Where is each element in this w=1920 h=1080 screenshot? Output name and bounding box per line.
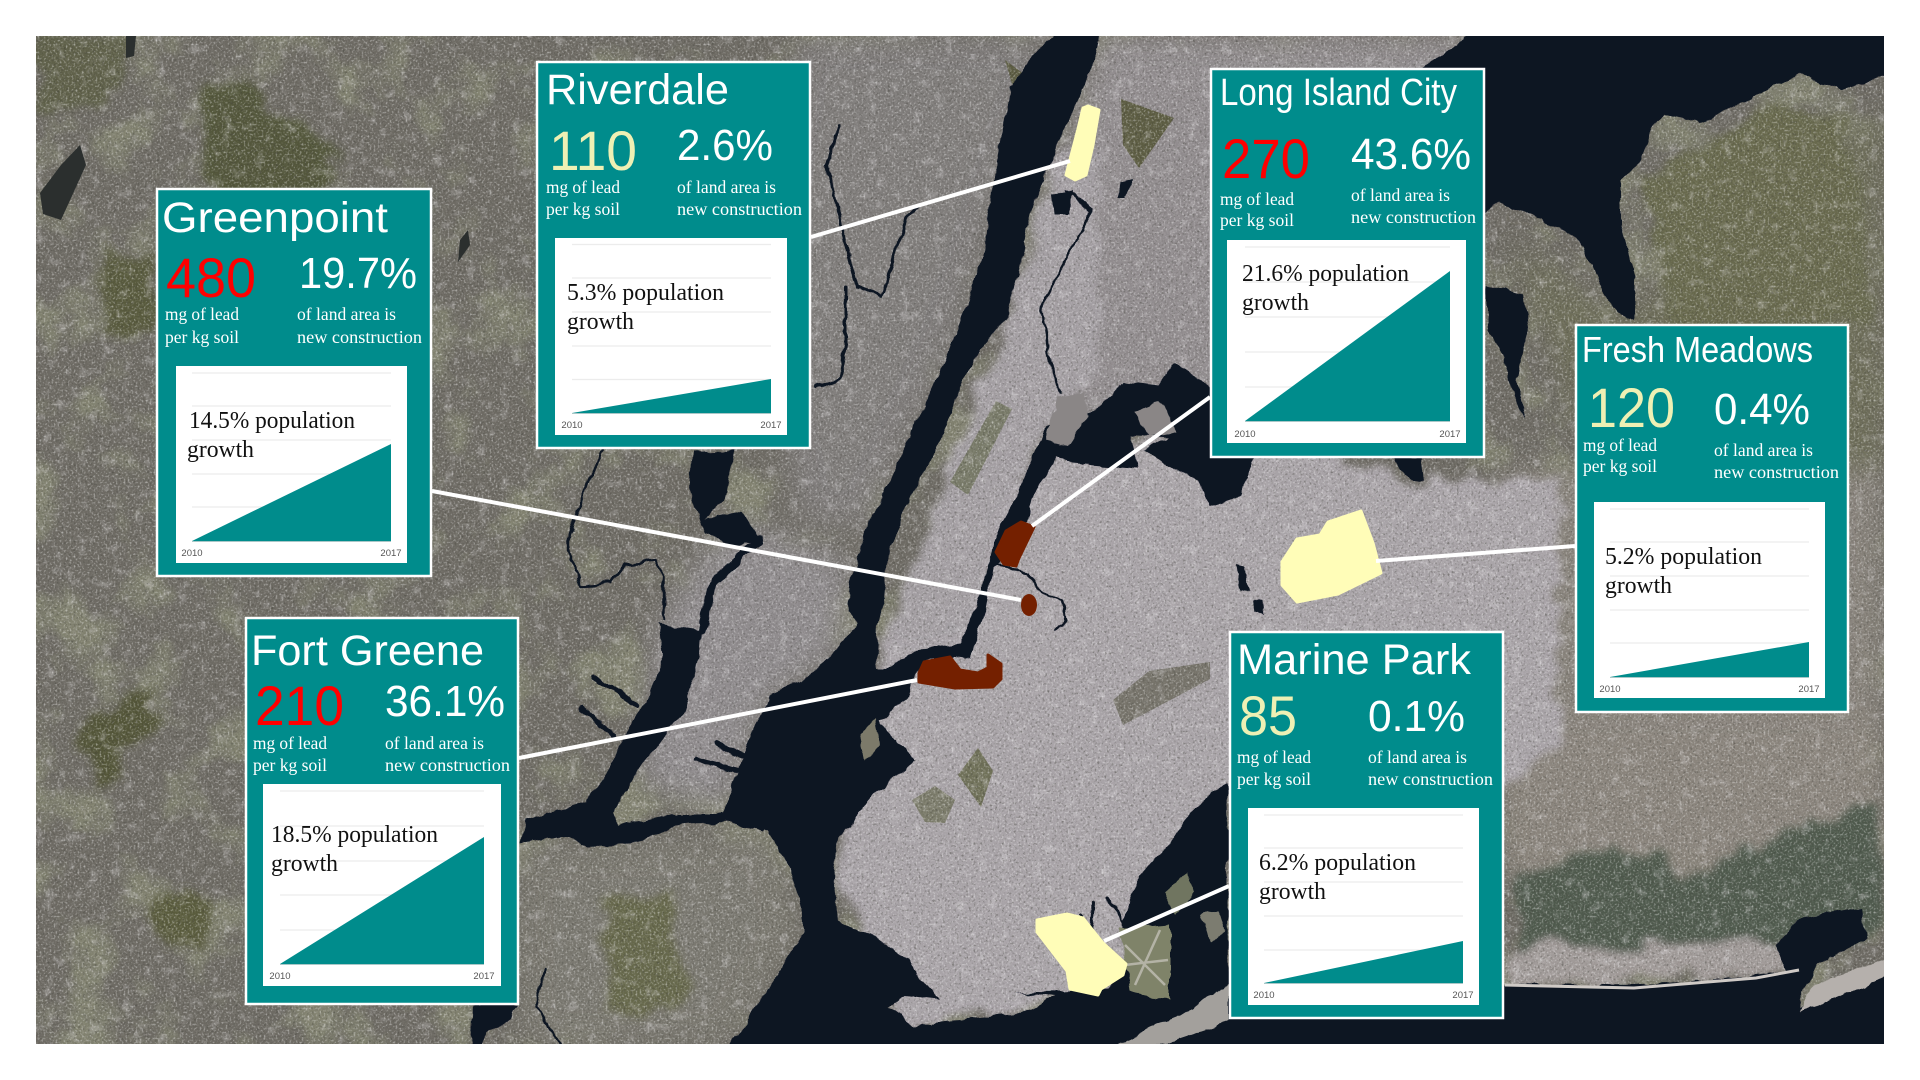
lead caption: mg of lead xyxy=(1220,189,1294,209)
area chart: growth xyxy=(271,851,338,877)
water: inlets and rivers xyxy=(470,127,1866,1048)
connector: Marine Park xyxy=(1104,886,1229,941)
connector: Riverdale xyxy=(811,161,1070,237)
all water bodies xyxy=(470,32,1888,1048)
area chart: 2017 xyxy=(380,548,402,559)
title: Fort Greene xyxy=(251,627,484,675)
area chart: growth xyxy=(1259,879,1326,905)
construction caption: new construction xyxy=(1351,207,1476,227)
panel: Greenpoint xyxy=(157,189,431,576)
panel: Riverdale xyxy=(537,62,810,448)
area chart: 5.2% population xyxy=(1605,544,1762,570)
lead caption: per kg soil xyxy=(1583,456,1657,476)
construction caption: of land area is xyxy=(677,177,776,197)
area chart: 21.6% population xyxy=(1242,261,1409,287)
area chart: 2010 xyxy=(1599,684,1621,695)
hotspot: Fort Greene xyxy=(919,655,1001,688)
airfield runways xyxy=(1125,930,1168,985)
lead caption: mg of lead xyxy=(1237,747,1311,767)
lead value: 270 xyxy=(1222,127,1310,190)
area chart: 6.2% population xyxy=(1259,850,1416,876)
construction caption: of land area is xyxy=(385,733,484,753)
lead caption: per kg soil xyxy=(165,327,239,347)
construction value: 0.1% xyxy=(1368,692,1465,741)
panel: Marine Park xyxy=(1230,632,1503,1018)
title: Riverdale xyxy=(546,66,729,114)
lead value: 120 xyxy=(1588,376,1675,439)
title: Marine Park xyxy=(1237,636,1472,684)
area chart: 5.3% population xyxy=(567,280,724,306)
area chart: growth xyxy=(567,309,634,335)
lead caption: mg of lead xyxy=(1583,435,1657,455)
area chart: 2017 xyxy=(473,971,495,982)
construction caption: new construction xyxy=(1714,462,1839,482)
lead caption: mg of lead xyxy=(165,304,239,324)
area chart: growth xyxy=(1605,573,1672,599)
connector: Greenpoint xyxy=(432,491,1021,600)
area chart xyxy=(1248,808,1479,1005)
lead caption: per kg soil xyxy=(546,199,620,219)
construction caption: new construction xyxy=(1368,769,1493,789)
lead value: 110 xyxy=(549,119,637,182)
area chart: 14.5% population xyxy=(189,408,355,434)
connector: Fort Greene xyxy=(519,680,917,758)
beach highlight xyxy=(1505,970,1799,988)
construction caption: new construction xyxy=(385,755,510,775)
hotspot: Fresh Meadows xyxy=(1282,511,1381,602)
area chart: 2010 xyxy=(1234,429,1256,440)
area chart: growth xyxy=(1242,290,1309,316)
connector: Long Island City xyxy=(1032,397,1210,526)
area chart: growth xyxy=(187,437,254,463)
area chart xyxy=(176,366,407,563)
area chart: 18.5% population xyxy=(271,822,438,848)
hotspot: Riverdale xyxy=(1066,106,1099,180)
area chart xyxy=(1594,502,1825,698)
construction value: 2.6% xyxy=(677,121,773,170)
hotspot: Long Island City xyxy=(996,522,1034,566)
islands and barrier beach xyxy=(860,394,1888,1048)
construction caption: new construction xyxy=(677,199,802,219)
lead caption: per kg soil xyxy=(1237,769,1311,789)
lead caption: mg of lead xyxy=(253,733,327,753)
lead value: 480 xyxy=(166,246,256,309)
area chart: 2017 xyxy=(760,420,782,431)
connector: Fresh Meadows xyxy=(1376,546,1575,561)
panel: Fresh Meadows xyxy=(1576,325,1848,712)
lead caption: mg of lead xyxy=(546,177,620,197)
construction caption: of land area is xyxy=(1714,440,1813,460)
construction value: 19.7% xyxy=(299,249,417,298)
construction caption: of land area is xyxy=(1351,185,1450,205)
hotspot: Greenpoint xyxy=(1021,594,1037,616)
lead value: 85 xyxy=(1239,684,1297,747)
panel: Long Island City xyxy=(1211,69,1484,457)
water: Newark Bay and Arthur Kill xyxy=(520,623,771,846)
area chart: 2010 xyxy=(269,971,291,982)
inland lakes xyxy=(40,36,470,262)
title: Greenpoint xyxy=(162,194,388,242)
construction value: 43.6% xyxy=(1351,130,1471,179)
lead caption: per kg soil xyxy=(253,755,327,775)
area chart: 2017 xyxy=(1439,429,1461,440)
lead caption: per kg soil xyxy=(1220,210,1294,230)
construction caption: of land area is xyxy=(1368,747,1467,767)
area chart xyxy=(1227,240,1466,443)
title: Fresh Meadows xyxy=(1582,329,1813,370)
area chart xyxy=(555,238,787,435)
construction value: 0.4% xyxy=(1714,385,1810,434)
construction caption: of land area is xyxy=(297,304,396,324)
area chart: 2017 xyxy=(1452,990,1474,1001)
lead value: 210 xyxy=(255,674,344,737)
title: Long Island City xyxy=(1220,72,1457,114)
panel: Fort Greene xyxy=(246,618,518,1004)
area chart: 2010 xyxy=(181,548,203,559)
parks and cemeteries xyxy=(912,60,1210,823)
construction caption: new construction xyxy=(297,327,422,347)
area chart xyxy=(263,784,501,986)
construction value: 36.1% xyxy=(385,677,505,726)
hotspot: Marine Park xyxy=(1037,914,1126,995)
water: Hudson, harbor, East River, Sound and Atlantic xyxy=(722,32,1888,1048)
area chart: 2010 xyxy=(561,420,583,431)
area chart: 2017 xyxy=(1798,684,1820,695)
area chart: 2010 xyxy=(1253,990,1275,1001)
